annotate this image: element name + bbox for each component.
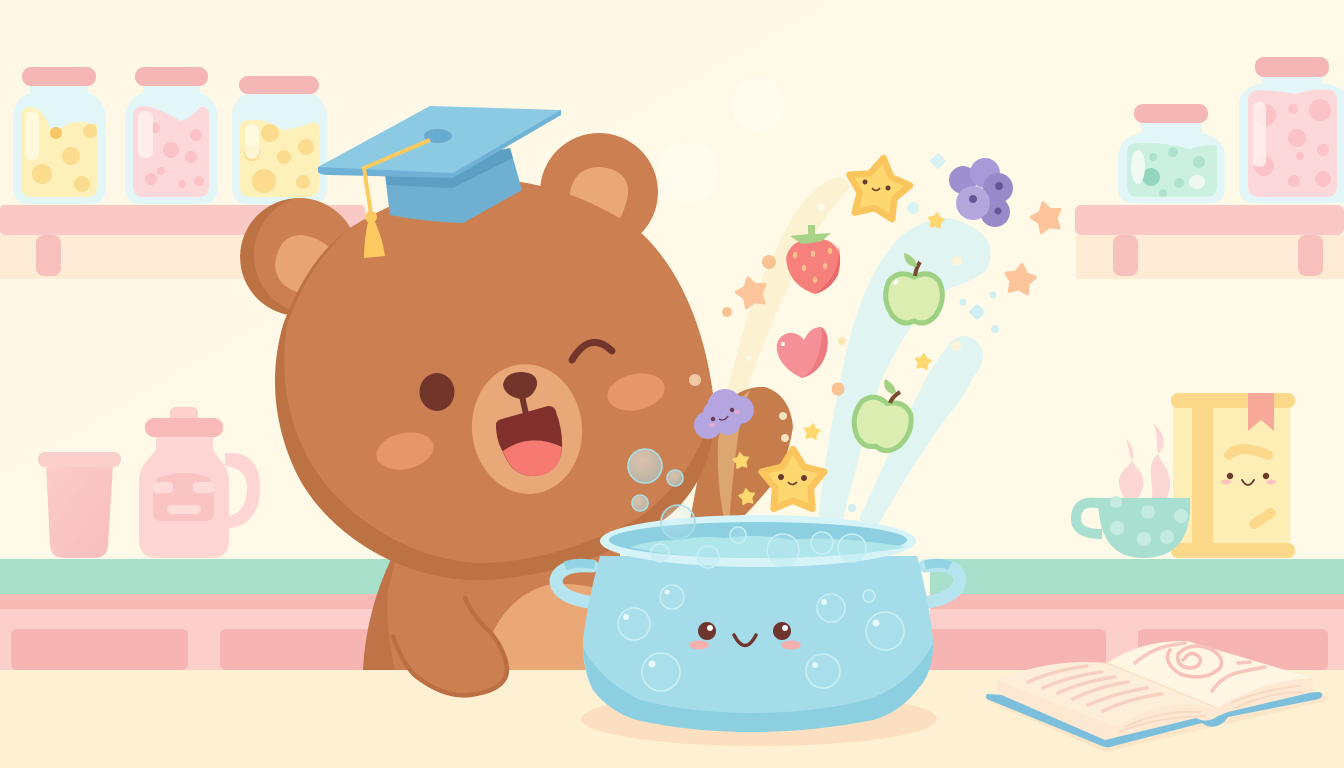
counter back, left bbox=[0, 559, 400, 670]
ear right bbox=[540, 133, 658, 251]
pink cup bbox=[38, 452, 121, 558]
pot bubbles bbox=[618, 527, 904, 691]
star face upper bbox=[862, 180, 890, 190]
strawberry bbox=[786, 225, 840, 294]
star face lower bbox=[778, 474, 807, 484]
bear body bbox=[363, 540, 610, 670]
bubble highlights bbox=[623, 590, 880, 668]
cheek right bbox=[604, 368, 668, 416]
pink blender jug bbox=[139, 407, 260, 558]
jar: berry large bbox=[1239, 57, 1344, 203]
blueberries bbox=[949, 158, 1013, 227]
counter back, right bbox=[925, 559, 1344, 670]
right shelf bbox=[1075, 205, 1344, 279]
muzzle bbox=[466, 359, 588, 499]
bear bbox=[240, 133, 793, 697]
green apple bottom bbox=[848, 379, 916, 455]
purple cloud bbox=[694, 389, 754, 439]
tongue bbox=[503, 440, 562, 476]
green apple top bbox=[886, 253, 942, 323]
ear left bbox=[240, 198, 350, 315]
water bbox=[630, 536, 907, 558]
table top bbox=[0, 670, 1344, 768]
pot shadow bbox=[581, 692, 937, 746]
pot rim bbox=[600, 515, 916, 567]
cheeks bbox=[373, 427, 437, 475]
small sparkle dots bbox=[689, 153, 999, 512]
bubbles near mouth bbox=[628, 449, 695, 539]
left shelf bbox=[0, 205, 365, 279]
pot inside bbox=[609, 522, 907, 558]
jar: lemon bbox=[13, 67, 106, 204]
wink bbox=[572, 342, 612, 360]
tassel bbox=[364, 140, 430, 214]
pot handles bbox=[556, 566, 595, 603]
pot face bbox=[689, 622, 801, 650]
pot body bbox=[583, 556, 933, 732]
nose stem bbox=[522, 396, 526, 414]
open book bbox=[980, 641, 1330, 752]
bear arm bbox=[388, 570, 508, 697]
head lighter face area bbox=[284, 181, 713, 563]
ear right inner bbox=[570, 167, 628, 222]
star: lower bbox=[762, 449, 824, 509]
eye bbox=[420, 373, 454, 411]
jar: honey bbox=[232, 76, 327, 204]
mouth bbox=[496, 406, 562, 476]
pot base shading bbox=[583, 643, 933, 732]
steam trails bbox=[658, 77, 990, 543]
nose bbox=[503, 372, 537, 399]
graduation cap bbox=[318, 106, 561, 258]
raised paw bbox=[690, 387, 793, 520]
cookbook standing bbox=[1171, 393, 1295, 558]
teacup with steam bbox=[1076, 423, 1190, 558]
star: upper bbox=[843, 153, 914, 221]
small yellow stars bbox=[732, 212, 945, 505]
head bbox=[275, 181, 714, 580]
pot bbox=[556, 515, 960, 732]
jar: strawberry bbox=[125, 67, 218, 204]
jar: mint bbox=[1118, 104, 1225, 203]
heart bbox=[777, 327, 828, 378]
small orange stars bbox=[734, 199, 1065, 309]
ear left inner bbox=[275, 235, 330, 292]
